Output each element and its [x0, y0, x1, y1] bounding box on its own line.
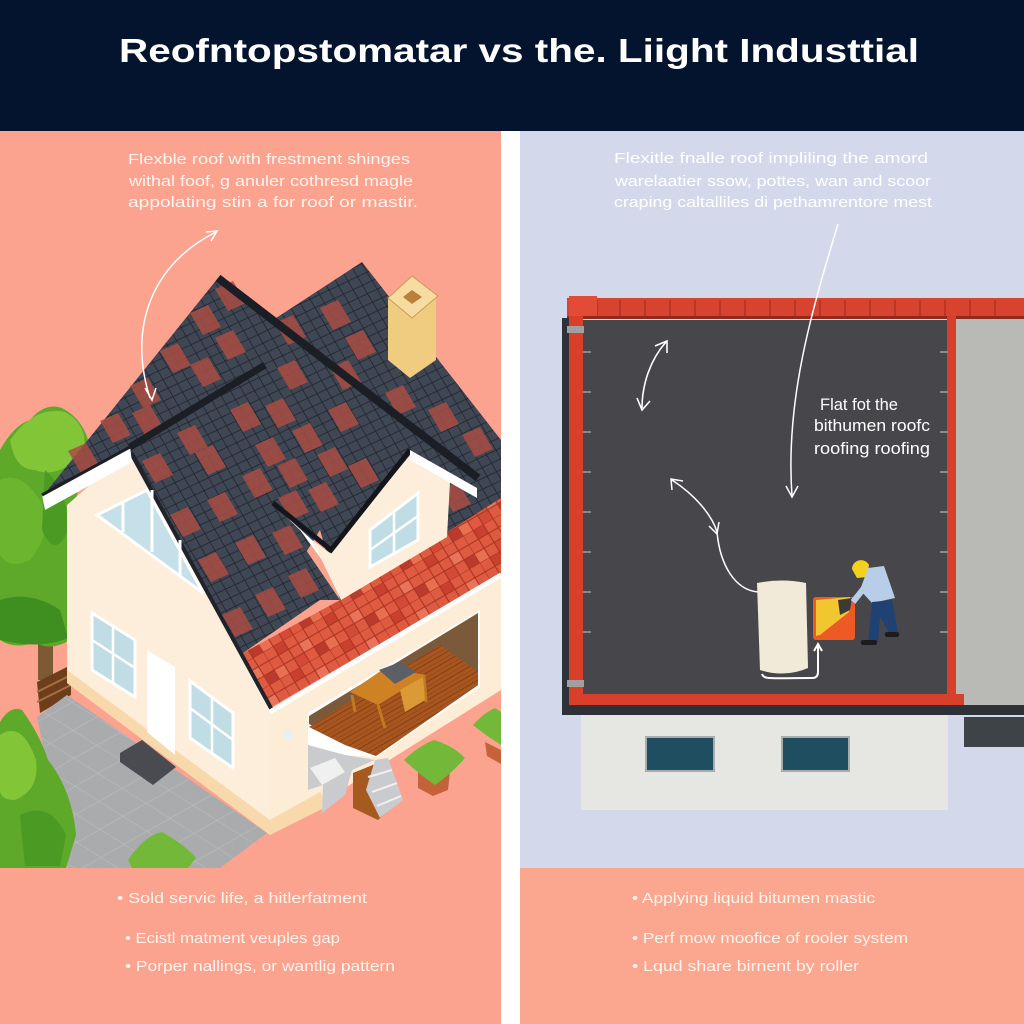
parapet left	[562, 318, 569, 713]
left bullet list: • Sold servic life, a hitlerfatment	[117, 891, 367, 907]
left arrow	[142, 232, 216, 398]
double arrow top	[637, 341, 667, 410]
flat roof label: bithumen roofc	[814, 417, 930, 435]
roof membrane	[582, 320, 949, 695]
left description text	[128, 152, 418, 211]
long arrow	[791, 224, 838, 496]
parapet bottom	[569, 694, 964, 705]
right wall	[270, 573, 501, 835]
dormer roof edges	[273, 450, 410, 550]
left bullet list	[117, 891, 395, 975]
gable window	[97, 490, 203, 593]
house	[42, 262, 501, 835]
shingle red patches	[68, 281, 493, 637]
dining table	[350, 662, 426, 728]
right bullet list: • Applying liquid bitumen mastic	[632, 891, 875, 907]
right bullet list	[632, 891, 908, 975]
wall below	[581, 712, 948, 810]
panel: left background	[0, 131, 501, 1024]
left wall	[67, 450, 270, 835]
panel: right background	[520, 131, 1024, 868]
wall lamp	[282, 729, 294, 741]
curved arrow	[671, 479, 758, 592]
outdoor stairs	[353, 760, 402, 820]
fasteners	[583, 352, 948, 632]
dormer window	[370, 493, 418, 567]
bitumen roll	[757, 580, 822, 678]
door step	[120, 740, 176, 785]
kitchen counter	[308, 745, 375, 813]
bushes and planters	[0, 708, 501, 868]
left description text: Flexble roof with frestment shinges	[128, 152, 410, 168]
right description text	[614, 151, 932, 211]
left description text: appolating stin a for roof or mastir.	[128, 195, 418, 211]
chimney	[388, 276, 438, 378]
right bullet list: • Perf mow moofice of rooler system	[632, 931, 908, 947]
right description text: craping caltalliles di pethamrentore mest	[614, 195, 932, 211]
right description text: Flexitle fnalle roof impliling the amord	[614, 151, 928, 167]
left bullet list: • Porper nallings, or wantlig pattern	[125, 959, 395, 975]
door	[147, 650, 175, 755]
dormer wall	[312, 455, 450, 600]
shingle roof	[42, 262, 501, 708]
roof ridges	[218, 278, 478, 478]
left tree	[0, 406, 90, 713]
lower right window	[190, 681, 233, 768]
worker	[852, 560, 899, 645]
right bullet list: • Lqud share birnent by roller	[632, 959, 859, 975]
lower left window	[92, 613, 135, 697]
panel: right bottom strip	[520, 868, 1024, 1024]
parapet right	[947, 316, 956, 696]
right building	[562, 296, 1024, 810]
interior opening	[308, 610, 480, 757]
flat roof label	[814, 396, 930, 458]
title: Reofntopstomatar vs the. Liight Industtial	[119, 32, 919, 69]
left description text: withal foof, g anuler cothresd magle	[128, 174, 413, 190]
roof edge and white trim	[131, 453, 272, 710]
header band	[0, 0, 1024, 131]
machine	[813, 597, 855, 640]
parapet back	[567, 298, 1024, 318]
left bullet list: • Ecistl matment veuples gap	[125, 931, 340, 947]
grey neighbouring roof	[955, 316, 1024, 706]
flat roof label: roofing roofing	[814, 440, 930, 458]
flat roof label: Flat fot the	[820, 396, 898, 414]
right description text: warelaatier ssow, pottes, wan and scoor	[614, 174, 931, 190]
paved patio	[37, 695, 267, 868]
red tile roof	[243, 498, 501, 708]
